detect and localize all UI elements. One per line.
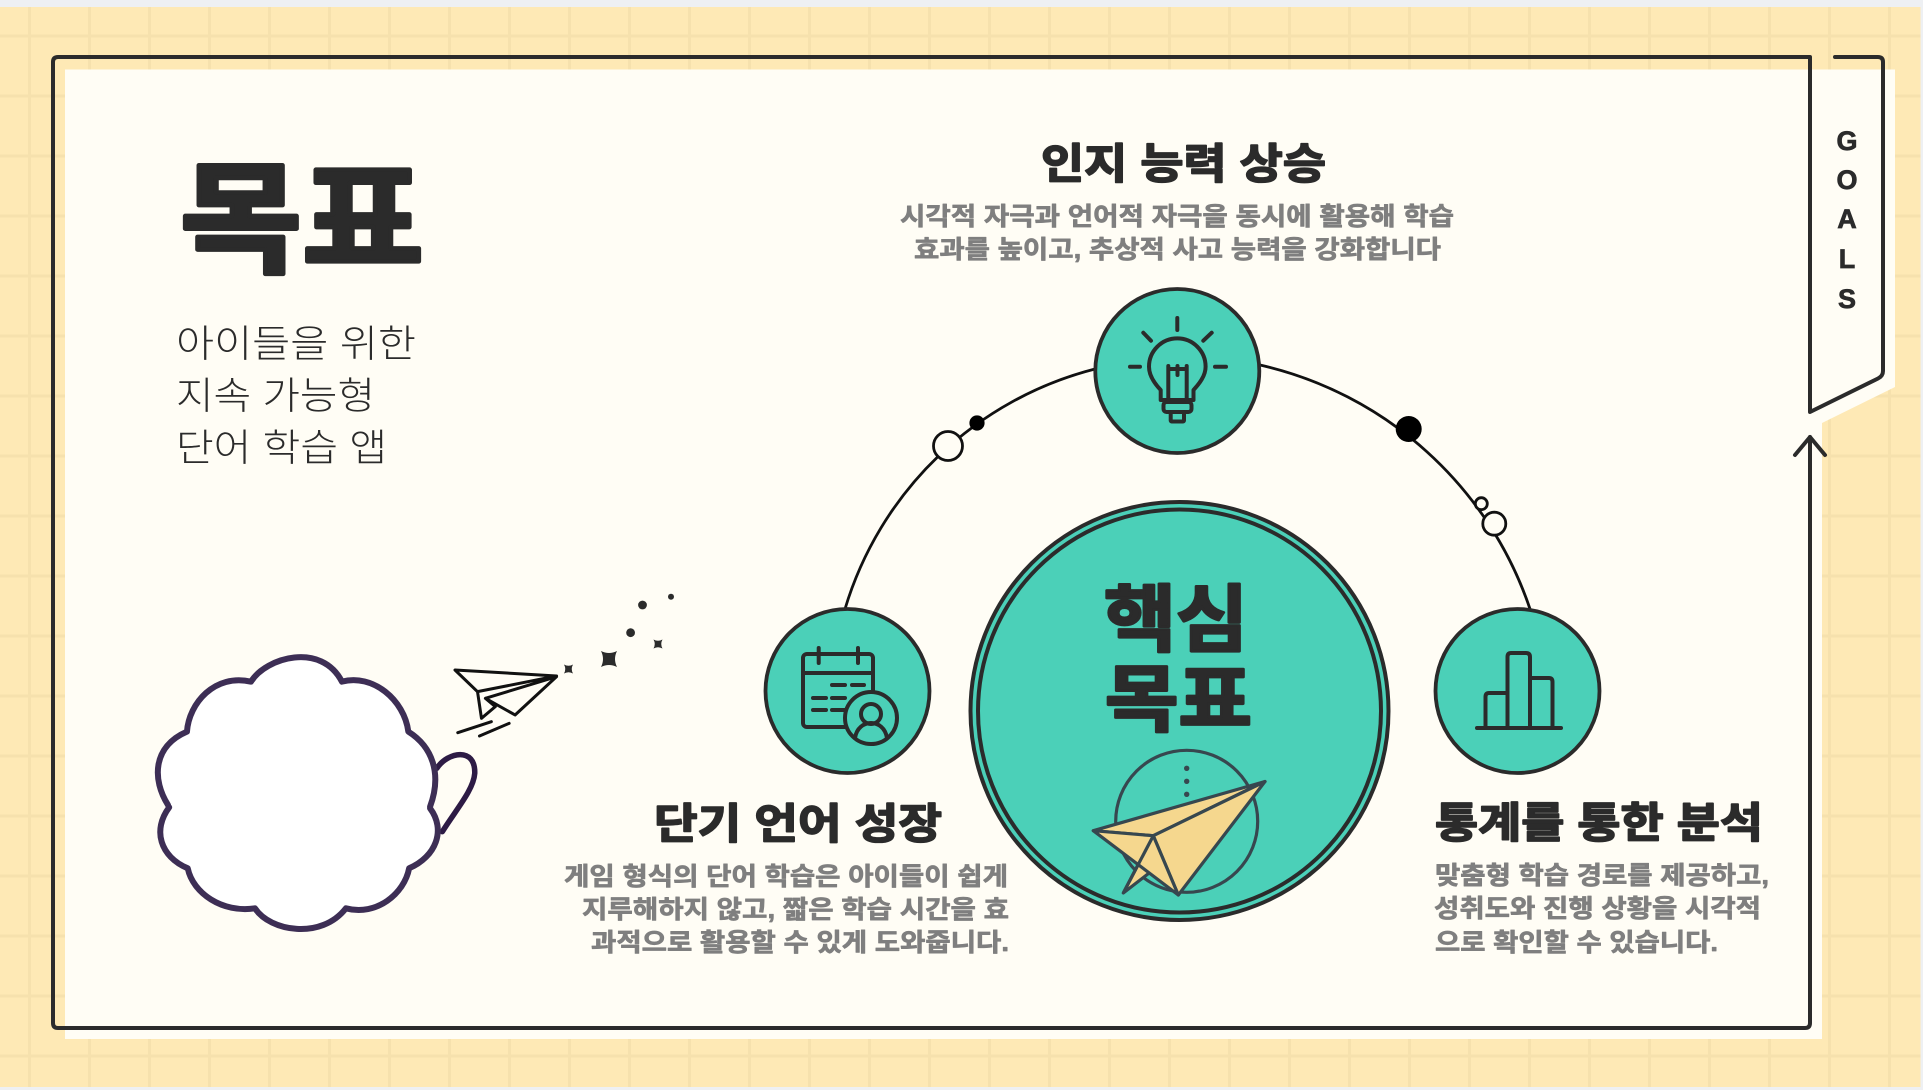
cloud fill bbox=[158, 657, 438, 929]
description: 과적으로 활용할 수 있게 도와줍니다. bbox=[591, 929, 1009, 957]
description: 효과를 높이고, 추상적 사고 능력을 강화합니다 bbox=[914, 236, 1441, 264]
title: 목표 bbox=[180, 153, 424, 289]
central heading bbox=[1104, 580, 1252, 741]
block: short-term language growth bbox=[564, 800, 1009, 957]
description: 게임 형식의 단어 학습은 아이들이 쉽게 bbox=[564, 863, 1008, 891]
block: cognitive ability bbox=[900, 140, 1454, 264]
illustration: sketched paper plane bbox=[455, 670, 557, 736]
icon: paper plane in circle bbox=[1093, 750, 1265, 895]
subtitle: 단어 학습 앱 bbox=[176, 428, 387, 470]
illustration: cloud-shaped cup bbox=[158, 657, 475, 929]
description: 지루해하지 않고, 짧은 학습 시간을 효 bbox=[582, 896, 1009, 924]
cloud outline bbox=[158, 657, 438, 929]
description: 시각적 자극과 언어적 자극을 동시에 활용해 학습 bbox=[900, 203, 1454, 231]
description: 맞춤형 학습 경로를 제공하고, bbox=[1435, 862, 1769, 890]
subtitle: 아이들을 위한 bbox=[176, 324, 416, 366]
tab label: GOALS: O bbox=[1836, 165, 1858, 195]
tab label: GOALS: L bbox=[1839, 244, 1855, 274]
tab label: GOALS: A bbox=[1837, 204, 1857, 234]
description: 성취도와 진행 상황을 시각적 bbox=[1434, 895, 1761, 923]
block: analysis through statistics bbox=[1434, 800, 1769, 957]
description: 으로 확인할 수 있습니다. bbox=[1435, 929, 1718, 957]
icon circle: bar chart bbox=[1436, 609, 1600, 773]
heading: 단기 언어 성장 bbox=[654, 800, 942, 848]
decorative stars and dots trail bbox=[564, 594, 674, 674]
subtitle bbox=[176, 324, 416, 470]
connecting arc with beads bbox=[845, 365, 1530, 609]
central circle: core goals bbox=[970, 502, 1388, 920]
description bbox=[564, 863, 1009, 957]
tab label: GOALS: S bbox=[1838, 284, 1856, 314]
subtitle: 지속 가능형 bbox=[176, 376, 375, 418]
heading: 통계를 통한 분석 bbox=[1435, 800, 1763, 846]
tab label: GOALS: G bbox=[1836, 126, 1858, 156]
icon circle: calendar with person bbox=[766, 609, 930, 773]
description bbox=[1434, 862, 1769, 957]
tab label: GOALS bbox=[1836, 126, 1858, 314]
cup handle bbox=[437, 755, 475, 832]
description bbox=[900, 203, 1454, 264]
icon circle: light bulb bbox=[1095, 289, 1259, 453]
central heading: 핵심 bbox=[1104, 580, 1248, 661]
heading: 인지 능력 상승 bbox=[1041, 140, 1326, 188]
central heading: 목표 bbox=[1105, 660, 1252, 741]
